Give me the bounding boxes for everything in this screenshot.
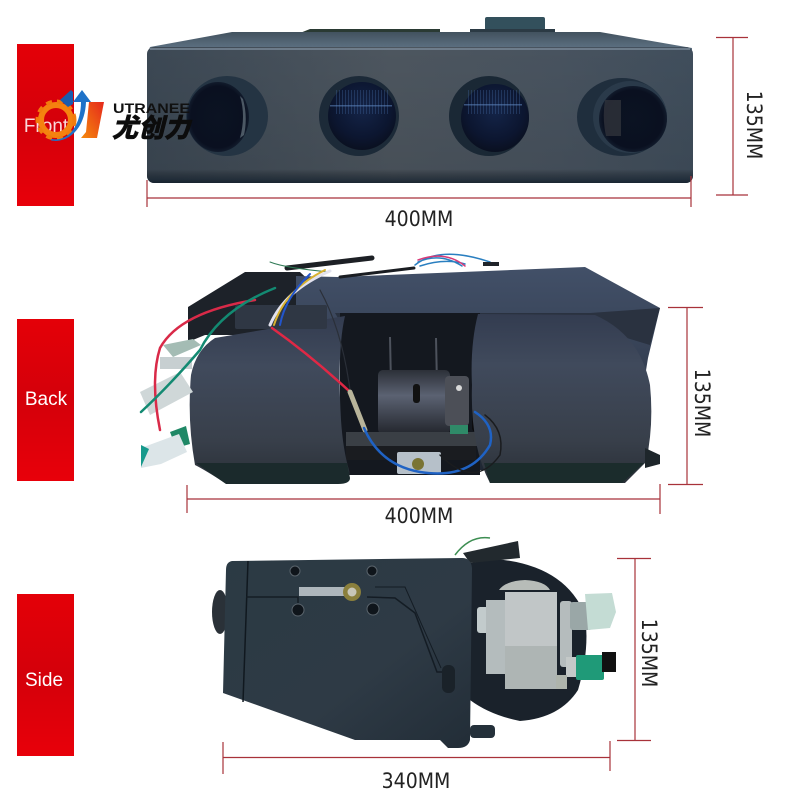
blower: right (472, 314, 651, 483)
drain pipe (470, 725, 495, 738)
rear blower disc (470, 559, 586, 721)
drain nozzle (442, 665, 455, 693)
label: Front (17, 44, 74, 206)
vent: centre right (449, 76, 529, 156)
vent: centre left (319, 76, 399, 156)
connectors (140, 339, 201, 468)
vent: far left (186, 76, 268, 156)
vent: far right (577, 78, 667, 156)
dimension: side height (617, 558, 661, 740)
label: Back: Back (25, 389, 68, 410)
logo: UTRANEE (38, 90, 193, 145)
dimension: side height: 135MM (637, 619, 661, 687)
dimension: front width (147, 176, 691, 231)
motor (378, 370, 450, 434)
recess behind motor (340, 313, 480, 475)
dimension: front width: 400MM (385, 207, 453, 231)
label: Back (17, 319, 74, 481)
label: Side: Side (25, 670, 63, 691)
panel: front view (17, 17, 766, 231)
housing (223, 558, 472, 748)
photo: side of unit (212, 538, 616, 748)
screws (290, 566, 379, 616)
logo wordmark: 尤创力 (112, 108, 193, 145)
photo: back of unit (140, 254, 660, 484)
top control box (463, 541, 520, 563)
dimension: side width (223, 741, 610, 793)
dimension: back width: 400MM (385, 504, 453, 528)
left dark plate (188, 272, 330, 342)
panel: side view (17, 538, 661, 793)
dimension: back height (668, 308, 714, 484)
icon: gear and arrow (38, 90, 104, 141)
motor bracket plates (390, 337, 438, 432)
air outlet stub (212, 590, 228, 634)
label: Front: Front (24, 116, 69, 137)
blower: left (190, 316, 349, 483)
label: Side (17, 594, 74, 756)
dimension: back width (187, 484, 660, 528)
dimension: side width: 340MM (382, 769, 450, 793)
slider bar and nut (299, 587, 359, 596)
expansion valve (477, 580, 616, 689)
dimension: front height (716, 38, 766, 195)
top plate (296, 267, 660, 470)
motor base (346, 432, 488, 446)
dimension: front height: 135MM (742, 91, 766, 159)
logo wordmark: UTRANEE (113, 101, 190, 116)
wires (141, 254, 501, 473)
panel: back view (17, 254, 714, 528)
dimension: back height: 135MM (690, 369, 714, 437)
wire cover (235, 305, 327, 329)
photo: front of unit (147, 17, 693, 183)
